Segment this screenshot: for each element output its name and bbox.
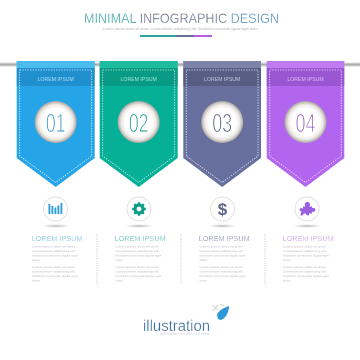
column 3 body: dolor (200, 278, 208, 282)
column 4 heading: LOREM IPSUM (283, 234, 334, 243)
column 2 heading: LOREM IPSUM (115, 234, 166, 243)
icon: bar chart (44, 197, 68, 221)
column 2 body: Lorem ipsum dolor sit amet (116, 244, 159, 248)
panel: banner 04 (267, 61, 344, 187)
column 1 body: consectetuer adipiscing elit (32, 249, 75, 253)
column 4 body: dolor (283, 278, 291, 282)
column 1 body: Lorem ipsum dolor sit amet (32, 265, 75, 269)
column 2 body: tincidunt commodo ligula eget (116, 274, 162, 278)
column 4 body: Lorem ipsum dolor sit amet (283, 265, 326, 269)
icon: pen nib (212, 304, 229, 320)
panel: banner 03 (183, 61, 261, 187)
text block: column 4 (283, 234, 334, 282)
column 2 body: dolor (116, 258, 124, 262)
column 3 body: consectetuer adipiscing elit (200, 249, 243, 253)
icon: dollar: $ (218, 200, 228, 219)
column 1 body: tincidunt commodo ligula eget (32, 254, 78, 258)
title: MINIMAL INFOGRAPHIC DESIGN (84, 10, 279, 26)
column 4 body: dolor (283, 258, 291, 262)
column 2 body: consectetuer adipiscing elit (116, 249, 159, 253)
hanging rod (0, 62, 360, 66)
column 1 body: Lorem ipsum dolor sit amet (32, 244, 75, 248)
column 1 body (32, 244, 78, 282)
column 3 body: Lorem ipsum dolor sit amet (200, 265, 243, 269)
column 3 heading: LOREM IPSUM (199, 234, 250, 243)
column 2 body: Lorem ipsum dolor sit amet (116, 265, 159, 269)
banner label: LOREM IPSUM (38, 77, 74, 83)
column 1 body: tincidunt commodo ligula eget (32, 274, 78, 278)
banner label: LOREM IPSUM (204, 77, 240, 83)
column 2 body: tincidunt commodo ligula eget (116, 254, 162, 258)
number disc: 04 (296, 110, 316, 138)
text block: column 2 (115, 234, 166, 282)
column 4 body (283, 244, 329, 282)
column 4 body: consectetuer adipiscing elit (283, 270, 326, 274)
logo tagline: www.illustration.com stock vector design (160, 332, 211, 336)
column 4 body: tincidunt commodo ligula eget (283, 274, 329, 278)
number disc: 03 (212, 110, 232, 138)
column 3 body: dolor (200, 258, 208, 262)
column 3 body: consectetuer adipiscing elit (200, 270, 243, 274)
logo: illustration wordmark (143, 304, 229, 336)
number disc: 01 (46, 110, 66, 138)
icon shadows (42, 224, 321, 228)
panel: banner 01 (17, 61, 95, 187)
icon: puzzle piece (295, 197, 319, 221)
text block: column 1 (32, 234, 82, 282)
column 2 body (116, 244, 162, 282)
logo: illustration wordmark: illustration (143, 318, 210, 335)
banner label: LOREM IPSUM (287, 77, 324, 83)
column 1 body: consectetuer adipiscing elit (32, 270, 75, 274)
dotted column dividers (97, 234, 265, 284)
icon: gear (127, 197, 151, 221)
column 4 body: tincidunt commodo ligula eget (283, 254, 329, 258)
icon: dollar (210, 197, 234, 221)
column 1 body: dolor (32, 258, 40, 262)
column 3 body: Lorem ipsum dolor sit amet (200, 244, 243, 248)
column 1 heading: LOREM IPSUM (32, 234, 82, 243)
number disc: 02 (129, 110, 149, 138)
banner label: LOREM IPSUM (121, 77, 157, 83)
column 3 body (200, 244, 246, 282)
column 3 body: tincidunt commodo ligula eget (200, 254, 246, 258)
column 3 body: tincidunt commodo ligula eget (200, 274, 246, 278)
title accent bar (140, 35, 212, 37)
column 4 body: Lorem ipsum dolor sit amet (283, 244, 326, 248)
column 2 body: consectetuer adipiscing elit (116, 270, 159, 274)
text block: column 3 (199, 234, 250, 282)
column 2 body: dolor (116, 278, 124, 282)
column 4 body: consectetuer adipiscing elit (283, 249, 326, 253)
column 1 body: dolor (32, 278, 40, 282)
subtitle: Lorem ipsum dolor sit amet, consectetuer adipiscing elit, tincidunt commodo ligula eget dolor (103, 27, 259, 31)
panel: banner 02 (100, 61, 178, 187)
